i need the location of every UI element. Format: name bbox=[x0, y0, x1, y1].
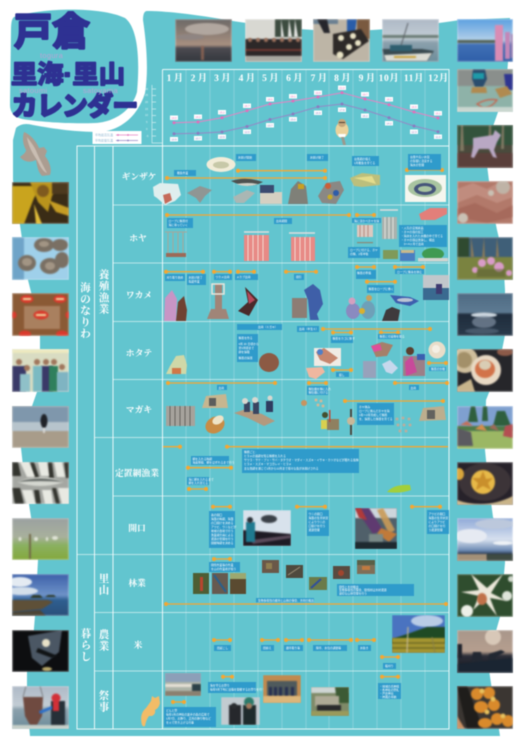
notes: 適切な山林管理を行う bbox=[339, 592, 367, 596]
category label: 海のなりわ: り bbox=[80, 316, 91, 328]
notes: サワラ・サケ・ブリ・サバ・タチウオ・マダイ・スズキ・イサキ・カツオなどが獲れる魚種 bbox=[244, 458, 359, 462]
temperature line chart: 14.0 bbox=[171, 116, 177, 120]
notes: 4月 20 日頃から bbox=[238, 342, 259, 346]
temperature line chart: 12.0 bbox=[244, 130, 250, 134]
notes bbox=[187, 449, 359, 485]
month headers: 4月 bbox=[239, 73, 257, 84]
notes: ・ホヤの殻は洗浄し、輸出 bbox=[401, 238, 435, 242]
notes: 海に網を入れるまで bbox=[188, 478, 214, 482]
notes: ・ホヤの殻の加工 bbox=[401, 230, 424, 234]
notes: 3〜4ヶ月で出荷 bbox=[401, 242, 424, 246]
notes: ・神輿の奉納 bbox=[380, 695, 396, 699]
temperature line chart: 15.0 bbox=[290, 118, 296, 122]
row labels: ホタテ bbox=[126, 348, 152, 358]
temperature line chart: 14.2 bbox=[195, 115, 201, 119]
category label: 海のなりわ: 海 bbox=[80, 281, 91, 294]
notes: を火で焚き上げる行事 bbox=[166, 720, 194, 724]
notes: 出荷 bbox=[410, 386, 416, 390]
left photo: seafood boxes bbox=[11, 292, 70, 337]
chart legend: 平均最高気温 bbox=[95, 132, 113, 137]
temperature line chart: 21.0 bbox=[339, 86, 345, 90]
temperature line chart: 11.0 bbox=[435, 135, 441, 139]
row labels bbox=[115, 172, 159, 650]
row: ワカメ bbox=[164, 265, 449, 321]
notes: 1月稚魚を育てる bbox=[354, 161, 375, 165]
temperature line chart: 30 bbox=[145, 87, 149, 91]
notes: 種牡蠣に付ける bbox=[308, 390, 328, 394]
notes: ・海水を入れた水槽の中で育てる bbox=[401, 234, 443, 238]
left photo: bird on the shore bbox=[12, 406, 70, 448]
category label: 養殖漁業: 養 bbox=[99, 268, 110, 281]
left photo: group of workers bbox=[11, 348, 70, 393]
photo: festival people bbox=[220, 696, 260, 726]
notes: 水揚げ開始 bbox=[238, 156, 252, 160]
notes: 出荷期間 bbox=[276, 219, 287, 223]
left photo: yellow seaweed bbox=[11, 181, 70, 225]
right photo: sea urchin bbox=[456, 461, 514, 506]
row: ホヤ bbox=[165, 208, 448, 262]
category label: 暮らし: 暮 bbox=[81, 627, 92, 640]
notes: 殺し bbox=[339, 373, 345, 377]
notes: 卵を採取 bbox=[238, 350, 250, 354]
category label: 暮らし: ら bbox=[81, 640, 91, 652]
right photo: scallops on grill bbox=[456, 348, 514, 393]
category label: 祭事: 祭 bbox=[99, 689, 110, 702]
notes: 水抜き bbox=[360, 646, 369, 650]
notes: ・人気の宮城産品 bbox=[401, 226, 424, 230]
notes: 出荷（半生ミ） bbox=[299, 327, 319, 331]
right photo: moonlit sea bbox=[456, 292, 514, 337]
notes bbox=[165, 269, 424, 293]
illustrations bbox=[166, 342, 446, 379]
bars bbox=[165, 168, 444, 180]
notes: ロープに種苗付 bbox=[168, 219, 188, 223]
notes: の種、2年半後 bbox=[350, 252, 369, 256]
bars bbox=[166, 381, 449, 403]
temperature line chart: 13.7 bbox=[267, 124, 273, 128]
row: ギンザケ bbox=[153, 154, 446, 205]
notes: 漁業組合員による bbox=[211, 533, 233, 537]
notes: 台風期の備え bbox=[354, 157, 371, 161]
right photo: lily bbox=[456, 573, 514, 618]
right photo: azalea by the sea bbox=[456, 236, 514, 281]
notes: アワビの開口 bbox=[428, 512, 445, 516]
right photo: deer in forest bbox=[456, 124, 514, 169]
row labels: 林業 bbox=[128, 577, 146, 588]
row: 祭事 bbox=[141, 673, 401, 727]
row labels: 開口 bbox=[128, 523, 146, 533]
right photo: silhouettes at sunset bbox=[456, 629, 514, 674]
illustrations bbox=[164, 275, 449, 321]
icon: orange cat bbox=[141, 696, 160, 726]
notes: 地域の漁場で行う bbox=[211, 529, 234, 533]
notes: 種苗を作る bbox=[238, 336, 253, 340]
notes: 翌3月頃まで bbox=[238, 346, 254, 350]
month headers: 2月 bbox=[191, 73, 209, 84]
month headers bbox=[167, 73, 449, 84]
bars bbox=[164, 557, 448, 606]
left photo: moon through trees bbox=[11, 629, 70, 673]
notes: 間伐作業等の作業 bbox=[211, 563, 234, 567]
category label: 暮らし: し bbox=[81, 651, 91, 663]
temperature line chart: 15 bbox=[145, 107, 149, 111]
notes: の口開けを行 bbox=[428, 524, 445, 528]
notes: 資源管理 bbox=[308, 528, 320, 532]
month headers: 7月 bbox=[311, 73, 329, 84]
title: 里海·里山 bbox=[11, 61, 125, 89]
notes: 除草、水位の調節等 bbox=[316, 646, 341, 650]
notes bbox=[164, 682, 401, 727]
notes: 田植え bbox=[263, 646, 272, 650]
row: 定置網漁業 bbox=[163, 445, 448, 493]
notes: 資源の管理を行う bbox=[211, 537, 234, 541]
notes: 水揚げ終了 bbox=[188, 276, 203, 280]
notes: 種類ごと: bbox=[244, 450, 256, 454]
notes: アワビ、ウニなどが bbox=[211, 525, 236, 529]
category label: 祭事: 事 bbox=[99, 700, 110, 714]
category label: 養殖漁業: 殖 bbox=[99, 280, 110, 292]
left photo: foggy paddy with egrets bbox=[11, 518, 70, 561]
notes: 生物多様性の保全、間伐材は木材資源 bbox=[339, 588, 387, 592]
notes: の影響に注意する bbox=[410, 159, 433, 163]
notes bbox=[209, 510, 449, 548]
photo: hook over boat bbox=[354, 507, 398, 550]
row: ホタテ bbox=[166, 324, 448, 379]
notes: 口開けを行う bbox=[308, 524, 325, 528]
top photo: scallop grill bbox=[312, 18, 371, 62]
temperature line chart: 16.5 bbox=[411, 105, 417, 109]
notes: 開催時期を決める bbox=[211, 541, 234, 545]
bars bbox=[212, 638, 400, 659]
notes: 種苗に付着物を取る bbox=[380, 335, 405, 339]
temperature line chart bbox=[145, 85, 442, 143]
top photo: fishing boat bbox=[382, 18, 440, 62]
notes: 間伐と木材搬出 bbox=[339, 585, 359, 589]
illustrations bbox=[165, 208, 448, 262]
notes: の口開けを決める bbox=[211, 521, 234, 525]
temperature line chart: 19.9 bbox=[315, 91, 321, 95]
bars bbox=[163, 445, 448, 491]
notes: ヒラメ・スズキ・マコガレイ・ヒラメ bbox=[244, 462, 292, 466]
month headers: 11月 bbox=[404, 73, 424, 84]
notes: 生物多様性の維持と山林の保全、木材の搬出 bbox=[258, 598, 314, 602]
notes: を、採苗した種苗を育てる bbox=[359, 417, 393, 421]
notes bbox=[209, 562, 414, 602]
photo: diver on shore bbox=[242, 510, 292, 547]
table grid bbox=[77, 70, 449, 729]
notes bbox=[214, 645, 396, 669]
temperature line chart: 10.7 bbox=[195, 136, 201, 140]
icon: kite bird bbox=[20, 132, 51, 176]
left photo: salmon catch bbox=[11, 461, 70, 505]
category label: 海のなりわ: の bbox=[80, 294, 91, 306]
bars bbox=[171, 675, 400, 704]
illustrations bbox=[153, 157, 446, 205]
month headers: 12月 bbox=[428, 73, 449, 84]
notes: によりアワビ bbox=[428, 520, 445, 524]
month headers: 9月 bbox=[359, 73, 377, 84]
right photo: red seaweed bbox=[456, 180, 514, 224]
temperature line chart: 10.9 bbox=[219, 135, 225, 139]
notes: 種苗の採苗 bbox=[238, 356, 253, 360]
temperature line chart: 17.6 bbox=[339, 108, 345, 112]
temperature line chart: 16.2 bbox=[362, 114, 368, 118]
category label: 海のなりわ: な bbox=[80, 305, 91, 317]
notes: ヒラメの適期を知る種類を入れる bbox=[244, 454, 286, 458]
notes: 海藻の生育状況 bbox=[308, 516, 328, 520]
row labels: ホヤ bbox=[129, 233, 147, 243]
notes bbox=[174, 154, 441, 176]
notes: を山の作業者が担う bbox=[211, 567, 236, 571]
temperature line chart: 16.9 bbox=[315, 111, 321, 115]
notes: 刈り取り始め bbox=[166, 276, 183, 280]
chart legend bbox=[92, 131, 142, 144]
row labels: 米 bbox=[134, 639, 143, 650]
temperature line chart: 12.3 bbox=[411, 130, 417, 134]
notes: 網を入れ替える bbox=[188, 481, 208, 485]
chart legend: 平均最低気温 bbox=[95, 138, 113, 142]
left photo: crabs bbox=[12, 236, 70, 280]
notes: 1月7日、お飾り、正月の飾り物など bbox=[166, 716, 211, 720]
notes: 塩蔵作業 bbox=[188, 280, 200, 284]
notes: 種牡蠣を種に入れ bbox=[308, 387, 331, 391]
row labels: マガキ bbox=[126, 404, 152, 414]
category label: 里山: 里 bbox=[99, 573, 110, 585]
notes: 水揚げ終了 bbox=[310, 156, 324, 160]
notes: 出荷（ミガキ） bbox=[258, 325, 278, 329]
month headers: 6月 bbox=[286, 73, 305, 84]
notes: 春の開口 bbox=[211, 513, 222, 517]
temperature line chart: 18.5 bbox=[267, 98, 273, 102]
category label: 養殖漁業: 漁 bbox=[99, 291, 111, 304]
right photo: harbour banners bbox=[456, 18, 514, 63]
temperature line chart: 19.7 bbox=[362, 92, 368, 96]
icon: green fish bbox=[387, 485, 411, 493]
notes: 種苗をロープに巻く bbox=[368, 287, 394, 291]
temperature line chart: 5 bbox=[146, 120, 148, 124]
notes: ・地域の氏神様 bbox=[380, 684, 399, 688]
month headers: 10月 bbox=[379, 73, 399, 84]
photo: indoor group bbox=[262, 674, 302, 704]
top photo: sunset sea bbox=[174, 18, 232, 62]
right photo: campsite bbox=[456, 406, 514, 450]
notes: 海水の管理 bbox=[410, 163, 424, 167]
photo: rice field bbox=[391, 614, 446, 654]
temperature line chart: 0 bbox=[146, 127, 148, 131]
title: satoyama bbox=[83, 86, 118, 95]
notes: 種苗の準備 bbox=[357, 271, 371, 275]
category label: 養殖漁業: 業 bbox=[99, 302, 110, 316]
temperature line chart: 15.2 bbox=[435, 112, 441, 116]
left photo: rocky coast bbox=[11, 573, 70, 617]
notes: 出荷 bbox=[218, 386, 224, 390]
notes: 海藻の時期、海藻 bbox=[211, 517, 234, 521]
bars bbox=[164, 265, 425, 284]
top photo: group in snow bbox=[244, 18, 303, 62]
category label: 農業: 農 bbox=[99, 628, 110, 641]
notes: どんと祭 bbox=[166, 708, 177, 712]
notes: ・各神社の祭礼 bbox=[380, 688, 399, 692]
temperature line chart: 18.2 bbox=[386, 98, 392, 102]
notes: 海底整備、網をはずれるまで行う bbox=[192, 460, 235, 464]
month headers: 8月 bbox=[334, 73, 353, 84]
notes: 間引 bbox=[296, 275, 302, 279]
notes: う資源管理 bbox=[428, 528, 443, 532]
notes: ホヤ挟み bbox=[359, 405, 370, 409]
bars bbox=[211, 505, 442, 509]
temperature line chart: 10 bbox=[145, 113, 149, 117]
icon: shrike bird bbox=[336, 119, 348, 145]
category label: 農業: 業 bbox=[99, 640, 110, 652]
category label: 里山: 山 bbox=[99, 584, 109, 596]
notes: 種苗の分散 bbox=[431, 367, 445, 371]
notes: 海に吊っていく bbox=[168, 223, 188, 227]
temperature line chart: 14.2 bbox=[386, 122, 392, 126]
month headers: 5月 bbox=[262, 73, 281, 84]
notes: 毎年1月の神社の裏手の森の広場で bbox=[166, 712, 210, 716]
photos bbox=[193, 560, 375, 594]
notes: 田起こし bbox=[217, 646, 228, 650]
notes: 稚魚作業 bbox=[177, 171, 188, 175]
category label: 海のなりわ: わ bbox=[80, 328, 91, 340]
row labels: 定置網漁業 bbox=[115, 467, 159, 478]
notes: メカブ出荷 bbox=[236, 275, 251, 279]
notes: 台風や高い水温 bbox=[410, 155, 430, 159]
notes: 網を入れる時期 bbox=[192, 457, 212, 461]
title: 戸倉 bbox=[14, 12, 90, 54]
notes: 稲刈り bbox=[385, 664, 394, 668]
right photo: grilled skewers bbox=[456, 685, 514, 730]
row: マガキ bbox=[166, 381, 449, 437]
row: 開口 bbox=[209, 505, 449, 549]
row labels: ギンザケ bbox=[122, 172, 156, 182]
notes: ロープに付ける、ホヤ bbox=[350, 248, 378, 252]
notes: 種苗をカゴに移す bbox=[332, 336, 355, 340]
row labels: ワカメ bbox=[126, 290, 152, 300]
title blob bbox=[10, 10, 138, 123]
title: カレンダー bbox=[12, 91, 138, 121]
notes bbox=[167, 218, 447, 258]
notes: 主な漁期を通じて1月から12月まで様々な魚が水揚げされる bbox=[244, 466, 319, 470]
temperature line chart: 15.2 bbox=[219, 110, 225, 114]
illustrations bbox=[166, 394, 446, 437]
row: 林業 bbox=[164, 557, 448, 606]
notes: によりウニの bbox=[308, 520, 325, 524]
row: 米 bbox=[212, 615, 445, 669]
temperature line chart: -5 bbox=[146, 134, 149, 138]
title: satoumi bbox=[19, 86, 47, 95]
notes: ロープに挟んだホヤを海 bbox=[359, 409, 390, 413]
photo: festival ground bbox=[164, 672, 202, 696]
left photo: net and worker bbox=[12, 686, 70, 730]
temperature line chart: 16.7 bbox=[244, 104, 250, 108]
notes bbox=[237, 324, 446, 377]
notes bbox=[217, 385, 419, 425]
notes: 雑草取り等 bbox=[286, 646, 300, 650]
bars bbox=[165, 213, 376, 217]
title: togura bbox=[40, 51, 64, 60]
notes: 海を守るお祭り bbox=[210, 684, 230, 688]
right photo: clouds over bay bbox=[456, 518, 514, 562]
notes: 毎年5月下旬に出張を開催するお祭りを行う bbox=[210, 688, 265, 692]
notes: ワカメ出荷 bbox=[216, 275, 230, 279]
temperature line chart: 10.9 bbox=[171, 138, 177, 142]
temperature line chart: 20 bbox=[145, 100, 149, 104]
notes: ロープに種糸を挟む bbox=[397, 270, 422, 274]
month headers: 3月 bbox=[214, 73, 233, 84]
notes: 1年〜2年育成して種苗 bbox=[359, 413, 387, 417]
photo: group at monument bbox=[310, 686, 350, 717]
bars bbox=[238, 325, 448, 372]
right photo: seaweed workers bbox=[456, 68, 514, 112]
notes: 海に浮かべホヤを採 bbox=[354, 219, 379, 223]
notes: ・戸倉神社 bbox=[380, 692, 394, 696]
title bbox=[11, 12, 138, 121]
notes: 海藻の生育状況 bbox=[428, 516, 448, 520]
temperature line chart: 19.1 bbox=[290, 94, 296, 98]
notes: ウニの開口 bbox=[308, 512, 323, 516]
month headers: 1月 bbox=[167, 73, 185, 84]
temperature line chart: 25 bbox=[145, 93, 149, 97]
